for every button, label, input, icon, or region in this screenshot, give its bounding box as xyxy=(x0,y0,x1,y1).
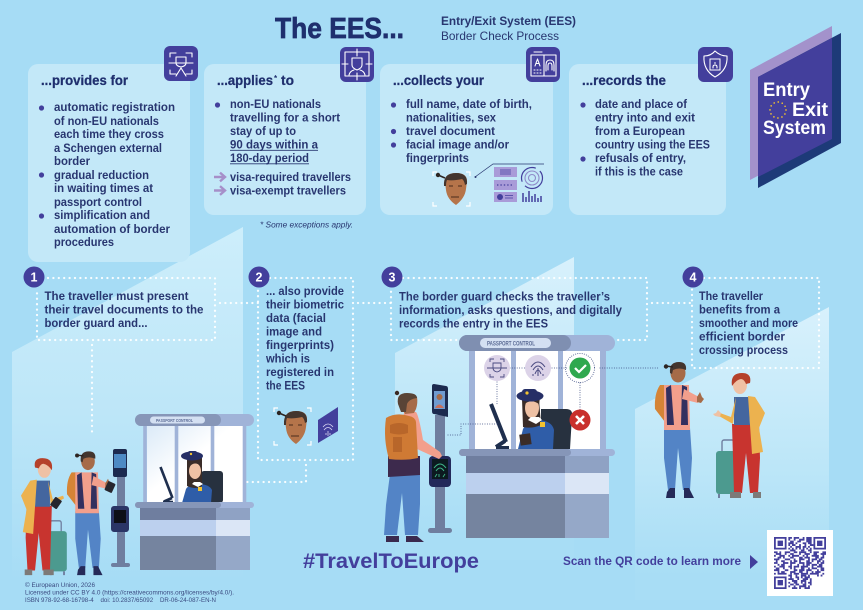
list: collects your: fingerprints xyxy=(406,152,469,165)
panel: records the xyxy=(569,64,726,215)
list: provides for: automation of border xyxy=(54,223,170,236)
title: The EES... xyxy=(275,13,404,45)
list: provides for: of non-EU nationals xyxy=(54,115,159,128)
illustration: kiosk, step 1 xyxy=(111,449,130,567)
list: applies to: non-EU nationals xyxy=(230,98,321,111)
step 3 text xyxy=(399,290,623,330)
fingerprint badge xyxy=(525,355,551,381)
icon: biometric face frame xyxy=(340,47,374,82)
list: applies to xyxy=(215,98,351,198)
list: provides for: simplification and xyxy=(54,209,150,222)
step 2 text xyxy=(265,285,345,392)
step 2 text: fingerprints) xyxy=(266,339,334,352)
monitor xyxy=(160,467,173,502)
list: collects your: travel document xyxy=(406,125,495,138)
icon: fingerprint tag xyxy=(318,407,338,443)
icons: verification flow xyxy=(448,354,660,435)
step 1: 1 xyxy=(31,270,38,284)
subtitle: Border Check Process xyxy=(441,29,559,43)
logo: Entry Exit System xyxy=(750,26,841,188)
step 3 text: The border guard checks the traveller’s xyxy=(399,290,610,304)
list: records the xyxy=(580,98,710,178)
list: collects your: nationalities, sex xyxy=(406,112,497,124)
woman with suitcase xyxy=(713,373,765,498)
guard xyxy=(181,451,223,503)
illustration: passport booth, step 1: PASSPORT CONTROL xyxy=(156,418,193,424)
heading: collects your: ...collects your xyxy=(393,73,485,88)
footer: legal: © European Union, 2026 xyxy=(25,581,95,589)
panel: collects your xyxy=(380,64,553,215)
panel: provides for xyxy=(28,64,190,262)
step 4 text xyxy=(699,290,798,357)
list: applies to: visa-exempt travellers xyxy=(230,184,346,198)
list: provides for: passport control xyxy=(54,196,142,209)
logo: Entry Exit System: System xyxy=(763,118,826,139)
counter xyxy=(466,456,565,473)
list: records the: if this is the case xyxy=(595,166,684,178)
list: records the: from a European xyxy=(595,125,685,138)
list: provides for: in waiting times at xyxy=(54,182,153,195)
step 4 text: smoother and more xyxy=(699,317,798,330)
icon: scanned face xyxy=(274,408,311,445)
step 2 text: data (facial xyxy=(266,312,326,325)
footer: legal: ISBN 978-92-68-16798-4 doi: 10.2837/65092 DR-06-24-087-EN-N xyxy=(25,597,216,604)
step 4 text: efficient border xyxy=(699,330,785,344)
heading: provides for: ...provides for xyxy=(41,73,129,88)
dotted connectors xyxy=(37,278,819,482)
counter xyxy=(140,507,216,520)
step 3 text: records the entry in the EES xyxy=(399,318,548,330)
step 1 xyxy=(24,266,204,330)
step 2 text: image and xyxy=(266,326,322,338)
step 1 text: their travel documents to the xyxy=(44,304,204,316)
step 1 text xyxy=(44,290,204,330)
illustration: passport booth, step 1 xyxy=(135,414,254,570)
face scan badge xyxy=(484,355,510,381)
step 2 text: their biometric xyxy=(266,298,345,312)
list: collects your: full name, date of birth, xyxy=(406,98,532,111)
footer: legal: Licensed under CC BY 4.0 (https://creativecommons.org/licenses/by/4.0/). xyxy=(25,590,234,596)
logo: Entry Exit System: Exit xyxy=(792,100,829,121)
monitor xyxy=(491,404,509,448)
step 4 text: The traveller xyxy=(699,290,763,303)
step 4 text: benefits from a xyxy=(699,304,781,316)
step 2: 2 xyxy=(256,270,263,284)
refusal badge xyxy=(570,410,590,430)
step 1 text: border guard and... xyxy=(44,317,148,330)
list: provides for: a Schengen external xyxy=(54,142,162,155)
step 1 text: The traveller must present xyxy=(44,290,189,303)
subtitle: Entry/Exit System (EES) xyxy=(441,14,576,28)
list: records the: entry into and exit xyxy=(595,112,695,124)
heading: applies to: * xyxy=(274,74,278,83)
icon: shield with id xyxy=(698,47,733,82)
step 3: 3 xyxy=(389,270,396,284)
list: provides for: procedures xyxy=(54,236,114,249)
step 4 xyxy=(682,266,798,357)
list: applies to: travelling for a short xyxy=(230,112,340,124)
list: provides for: each time they cross xyxy=(54,128,164,141)
list: records the: date and place of xyxy=(595,98,687,111)
step 4: 4 xyxy=(690,270,697,284)
man with backpack xyxy=(655,362,704,498)
list: provides for: gradual reduction xyxy=(54,169,149,182)
footer: legal xyxy=(25,581,234,604)
illustration: passport booth, step 3 xyxy=(459,335,615,538)
step 2 text: ... also provide xyxy=(266,285,345,298)
QR code xyxy=(767,530,833,596)
icon: passport and fingerprint xyxy=(526,47,560,82)
guard xyxy=(516,389,572,449)
step 2 text: the EES xyxy=(266,380,305,392)
arrows: visa types xyxy=(214,173,225,195)
hashtag: #TravelToEurope xyxy=(303,550,479,573)
list: records the: refusals of entry, xyxy=(595,152,686,165)
list: provides for: automatic registration xyxy=(54,101,175,114)
step 3 text: information, asks questions, and digitally xyxy=(399,304,623,317)
QR prompt: Scan the QR code to learn more xyxy=(563,554,741,568)
illustration: woman and man, step 1 xyxy=(21,451,116,575)
footnote: * Some exceptions apply. xyxy=(260,220,353,230)
step 3 xyxy=(382,266,623,330)
step 4 text: crossing process xyxy=(699,344,788,357)
logo: Entry Exit System: Entry xyxy=(763,80,810,101)
heading: applies to: to xyxy=(281,73,294,88)
step 2 text: registered in xyxy=(266,366,334,379)
list: applies to: visa-required travellers xyxy=(230,171,351,184)
heading: records the: ...records the xyxy=(582,73,666,88)
list: provides for: border xyxy=(54,155,90,168)
list: applies to: 90 days within a xyxy=(230,138,319,152)
illustration: passport booth, step 3: PASSPORT CONTROL xyxy=(487,340,535,348)
illustration: traveller at kiosk, step 3 xyxy=(384,384,452,542)
list: records the: country using the EES xyxy=(595,138,710,152)
icon: face scan xyxy=(433,172,470,206)
list: collects your xyxy=(391,98,532,165)
list: provides for xyxy=(39,101,175,249)
illustration: travellers talking, step 4 xyxy=(655,362,765,498)
subtitle xyxy=(441,14,576,43)
icon: face recognition xyxy=(164,46,198,81)
icon: data panels xyxy=(474,164,544,202)
step 2 text: which is xyxy=(265,352,310,366)
panel: applies to xyxy=(204,64,366,215)
check badge xyxy=(566,354,594,382)
list: collects your: facial image and/or xyxy=(406,138,509,152)
list: applies to: 180-day period xyxy=(230,152,309,165)
heading: applies to: ...applies xyxy=(217,73,273,88)
passports held xyxy=(50,481,116,509)
step 2 xyxy=(248,266,345,445)
list: applies to: stay of up to xyxy=(230,125,296,138)
